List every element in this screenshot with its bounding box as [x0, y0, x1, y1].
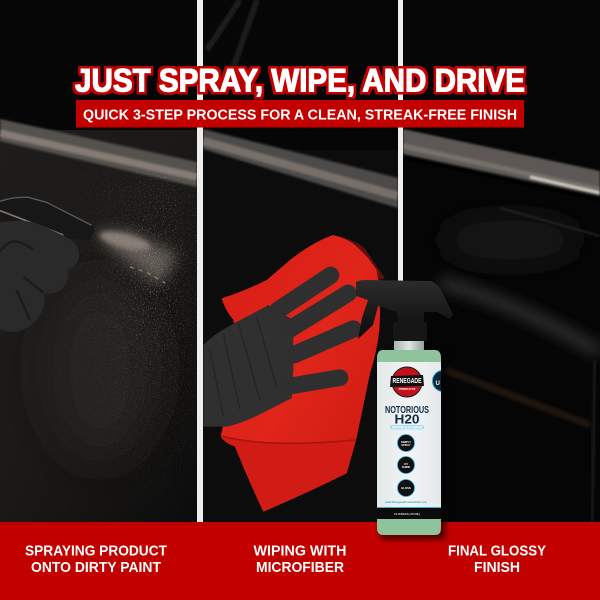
- side badge: [432, 370, 441, 392]
- bottom caption band: [0, 522, 600, 600]
- fingers: [278, 275, 353, 387]
- feature badge 2: SHINE: [402, 465, 410, 469]
- feature badge 3: GLOSS: [401, 486, 411, 490]
- sprayer cap: [393, 322, 427, 341]
- brand logo: RENEGADE: [392, 378, 422, 385]
- caption: step 3: FINISH: [474, 559, 520, 576]
- bottle label: H20: [394, 412, 420, 426]
- panel dividers: [197, 0, 403, 522]
- brand logo: [390, 367, 424, 397]
- black gloved hand with sprayer: [0, 197, 94, 332]
- bottle body: [377, 350, 441, 535]
- feature badge 3: [398, 480, 414, 496]
- paint trim reflection: [203, 129, 398, 208]
- subtitle banner: QUICK 3-STEP PROCESS FOR A CLEAN, STREAK-FREE FINISH: [83, 108, 517, 124]
- paint trim reflection: [0, 119, 197, 187]
- panel: final glossy finish: [403, 128, 600, 522]
- black gloved hand: [203, 275, 353, 427]
- title: JUST SPRAY, WIPE, AND DRIVE: [75, 62, 525, 98]
- palm: [203, 305, 293, 427]
- feature badge 2: UV: [404, 462, 408, 466]
- product name: NOTORIOUS: [385, 405, 429, 416]
- bottle neck: [394, 338, 424, 352]
- spray mist: [60, 170, 197, 522]
- caption: step 3: FINAL GLOSSY: [448, 542, 546, 560]
- glossy trim reflection: [403, 129, 600, 196]
- caption: step 2: MICROFIBER: [256, 559, 344, 576]
- sprayer trigger head: [356, 280, 453, 339]
- panel: spraying product: [0, 117, 197, 522]
- blue descriptor pill: WATERLESS WASH: [392, 426, 423, 430]
- feature badge 2: [398, 456, 414, 474]
- bottle label: [377, 362, 441, 519]
- caption: step 1: SPRAYING PRODUCT: [25, 542, 167, 560]
- label fine print: www.RenegadeProductsUSA.com: [385, 500, 428, 504]
- sprayer head: [0, 197, 94, 241]
- feature badge 1: [398, 434, 414, 452]
- brand logo: PRODUCTS: [399, 387, 415, 391]
- glove: [0, 221, 79, 332]
- feature badge 1: SPRAY: [401, 443, 411, 447]
- caption: step 1: ONTO DIRTY PAINT: [31, 559, 161, 576]
- product bottle: [356, 280, 454, 540]
- panel: wiping with microfiber: [203, 0, 398, 522]
- side badge: U: [436, 381, 440, 387]
- feature badge 1: SIMPLY: [401, 440, 411, 444]
- caption: step 2: WIPING WITH: [254, 542, 346, 560]
- bottle label: 16 OUNCES (473 ML): [394, 512, 420, 516]
- subtitle banner: [76, 100, 524, 128]
- microfiber towel: [221, 235, 385, 512]
